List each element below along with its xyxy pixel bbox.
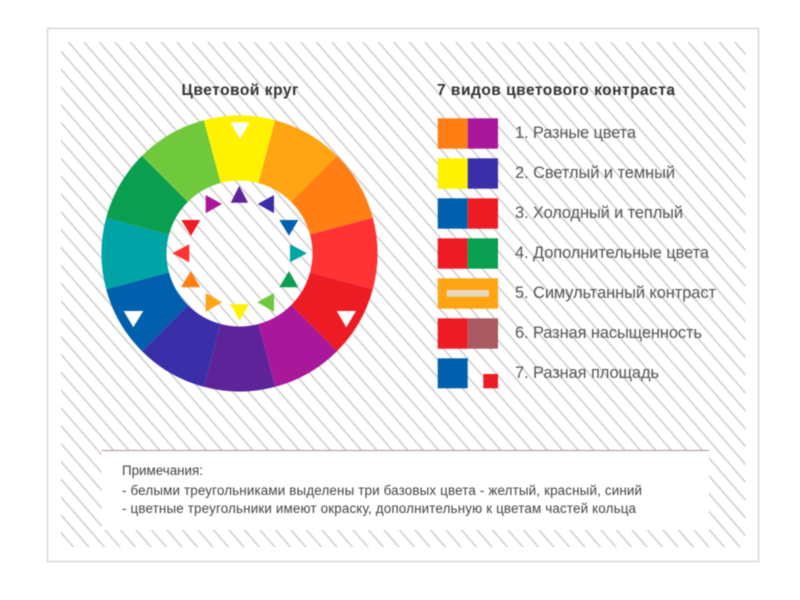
legend item 1: different colours: 1. Разные цвета (515, 124, 637, 142)
legend item 7: area: 7. Разная площадь (515, 364, 659, 382)
background: diagonal stripes (61, 42, 746, 547)
note: white triangles: - белыми треугольниками выделены три базовых цвета - желтый, красный, синий (122, 483, 642, 498)
chart: colour wheel ring (101, 115, 378, 392)
icons: white base-colour triangles (124, 122, 356, 327)
legend item 2: light and dark (438, 158, 675, 189)
heading: colour wheel: Цветовой круг (182, 82, 299, 99)
heading: seven contrasts: 7 видов цветового контраста (437, 82, 675, 99)
legend item 3: cold and warm (438, 198, 683, 229)
legend item 1: different colours (438, 118, 637, 149)
legend item 5: simultaneous contrast: 5. Симультанный контраст (515, 284, 716, 302)
legend item 5: simultaneous contrast (438, 278, 716, 309)
legend item 3: cold and warm: 3. Холодный и теплый (515, 204, 683, 222)
note: coloured triangles: - цветные треугольники имеют окраску, дополнительную к цветам частей кольца (122, 501, 637, 516)
legend item 4: complementary: 4. Дополнительные цвета (515, 244, 710, 262)
legend item 4: complementary (438, 238, 710, 269)
panel: card background (48, 28, 758, 562)
legend item 7: area (438, 358, 659, 388)
panel: notes (102, 450, 709, 530)
notes heading: Примечания: (122, 463, 203, 478)
legend item 2: light and dark: 2. Светлый и темный (515, 164, 675, 182)
legend item 6: saturation (438, 318, 702, 349)
legend item 6: saturation: 6. Разная насыщенность (515, 324, 702, 342)
icons: coloured inner triangles (172, 186, 307, 321)
